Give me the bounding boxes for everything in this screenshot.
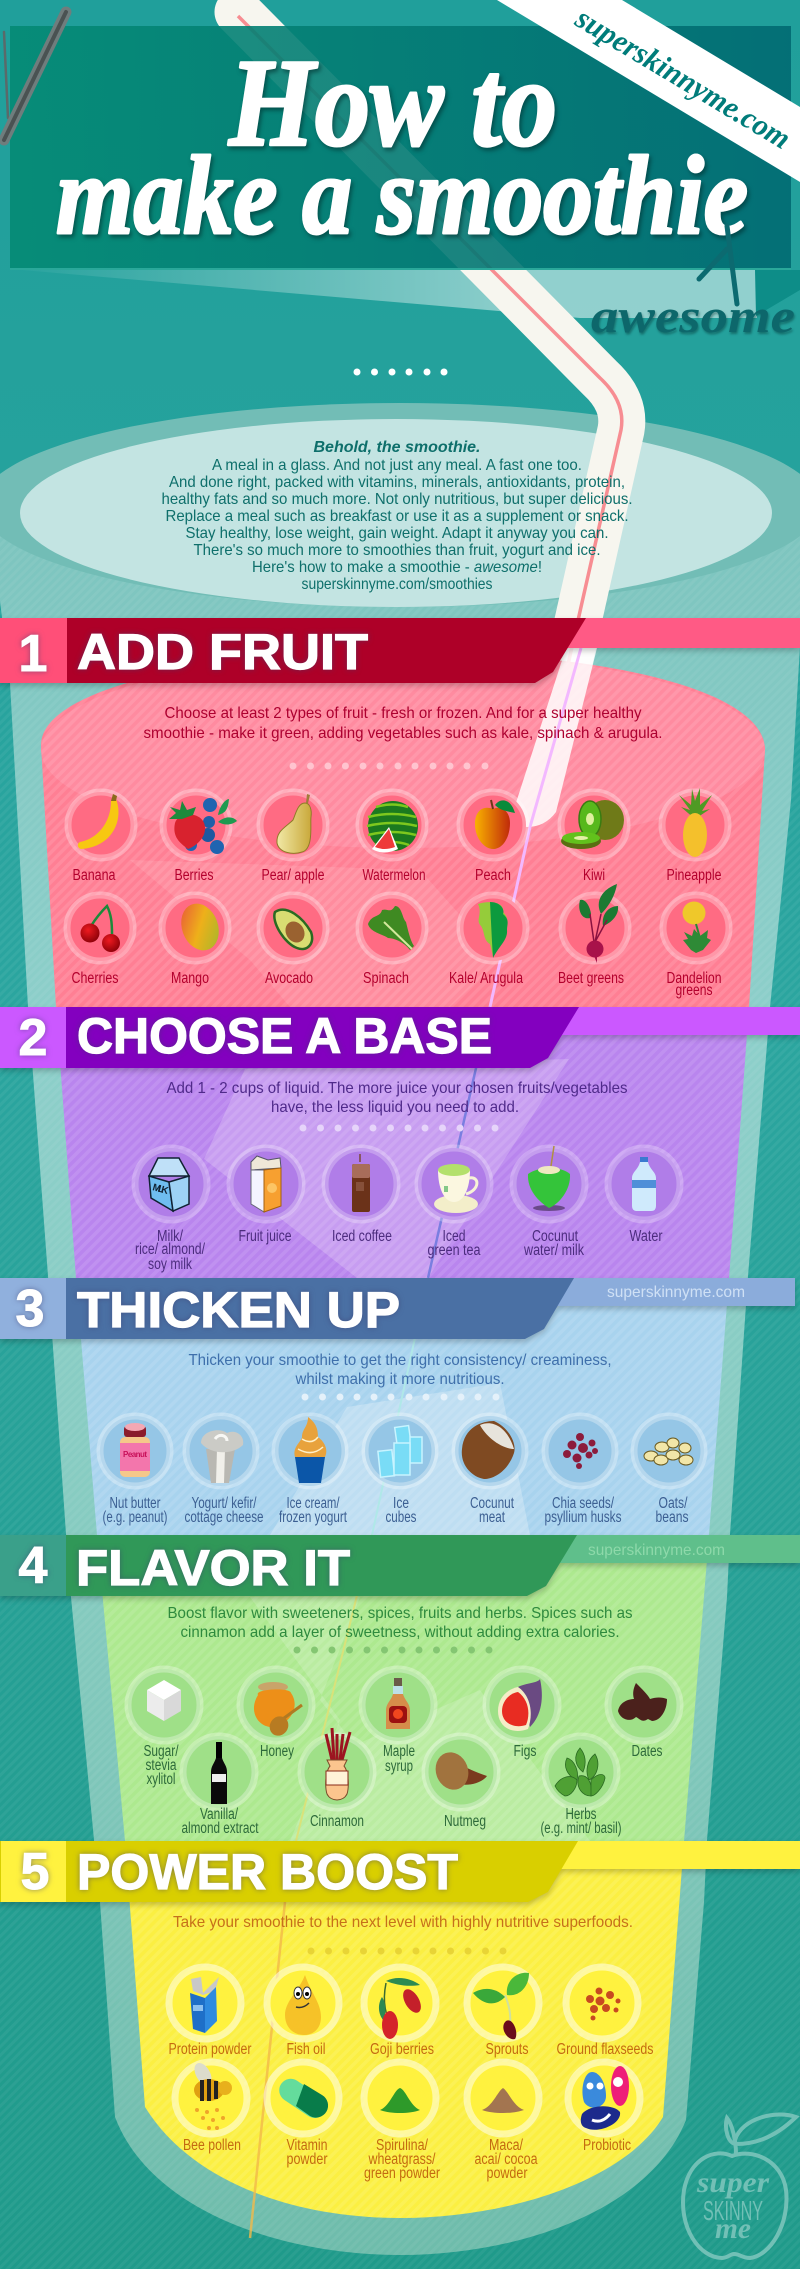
boost labels: Ground flaxseeds [556, 2041, 654, 2058]
flavor labels: Dates [632, 1743, 663, 1760]
flavor banner: superskinnyme.com [588, 1542, 725, 1559]
intro text: And done right, packed with vitamins, minerals, antioxidants, protein, [169, 474, 625, 491]
boost liquid [125, 1841, 684, 2238]
fruit labels [72, 867, 722, 999]
thicken labels: Ice [393, 1495, 409, 1512]
base text [166, 1080, 628, 1116]
fruit labels: Cherries [72, 970, 119, 987]
icon: figs [498, 1679, 542, 1731]
base labels [135, 1228, 662, 1273]
boost dots [308, 1948, 506, 1954]
boost banner: POWER BOOST [77, 1844, 458, 1900]
boost banner [0, 1841, 800, 1902]
fruit banner: ADD FRUIT [77, 624, 368, 680]
panel: power boost [0, 1841, 800, 2238]
thicken labels: cottage cheese [184, 1509, 264, 1526]
fruit circles [67, 792, 729, 961]
flavor labels: Figs [514, 1743, 537, 1760]
icon: honey [254, 1682, 302, 1739]
boost labels: powder [486, 2165, 528, 2182]
thicken labels: (e.g. peanut) [102, 1509, 168, 1526]
icon: spirulina [380, 2088, 420, 2113]
thicken labels: Chia seeds/ [552, 1495, 615, 1512]
icon: oats [644, 1438, 693, 1465]
flavor labels: xylitol [146, 1771, 176, 1788]
base labels: Cocunut [532, 1228, 579, 1245]
icon: fish oil [285, 1975, 321, 2035]
icon: ice cream [294, 1417, 326, 1483]
fruit labels: Kale/ Arugula [449, 970, 523, 987]
fruit text [144, 705, 662, 742]
thicken circles [100, 1416, 704, 1486]
flavor text: cinnamon add a layer of sweetness, without adding extra calories. [180, 1624, 620, 1641]
icon: maple syrup [386, 1678, 410, 1729]
logo: super skinny me apple [683, 2115, 796, 2258]
base text: have, the less liquid you need to add. [271, 1099, 519, 1116]
boost labels: acai/ cocoa [474, 2151, 538, 2168]
title banner [10, 26, 800, 316]
intro text: healthy fats and so much more. Not only nutritious, but super delicious. [162, 491, 632, 508]
thicken labels: Nut butter [110, 1495, 160, 1512]
flavor labels: Vanilla/ [200, 1806, 239, 1823]
thicken labels: beans [656, 1509, 689, 1526]
icon: ground flaxseeds [586, 1988, 620, 2020]
flavor labels: Herbs [566, 1806, 597, 1823]
corner ribbon: superskinnyme.com [569, 0, 797, 156]
thicken labels: frozen yogurt [279, 1509, 348, 1526]
thicken banner: THICKEN UP [77, 1282, 400, 1338]
flavor labels: Cinnamon [310, 1813, 364, 1830]
thicken banner: superskinnyme.com [607, 1284, 745, 1301]
icon: nut butter: Peanut [123, 1450, 147, 1459]
icon: water [632, 1157, 656, 1211]
fruit liquid [41, 648, 765, 1007]
boost labels: Sprouts [486, 2041, 529, 2058]
logo: super skinny me apple: me [715, 2212, 751, 2245]
icon: banana [78, 794, 119, 849]
intro text: superskinnyme.com/smoothies [302, 576, 492, 593]
boost labels: green powder [364, 2165, 440, 2182]
base labels: soy milk [148, 1256, 192, 1273]
logo: super skinny me apple: super [696, 2166, 769, 2199]
boost circles [169, 1967, 640, 2134]
flavor labels: (e.g. mint/ basil) [540, 1820, 622, 1837]
thicken banner [0, 1278, 795, 1339]
base dots [300, 1124, 498, 1132]
icon: milk [149, 1158, 189, 1211]
flavor labels: Sugar/ [144, 1743, 179, 1760]
corner ribbon [497, 0, 800, 182]
intro text [162, 439, 632, 593]
intro text: There's so much more to smoothies than fruit, yogurt and ice. [194, 542, 600, 559]
boost labels: wheatgrass/ [368, 2151, 436, 2168]
pin [4, 12, 66, 140]
boost labels: Vitamin [286, 2137, 328, 2154]
boost text: Take your smoothie to the next level with highly nutritive superfoods. [173, 1914, 633, 1931]
thicken labels [102, 1495, 689, 1526]
flavor text [168, 1605, 632, 1641]
base labels: Milk/ [157, 1228, 184, 1245]
fruit labels: Peach [475, 867, 511, 884]
flavor labels: stevia [146, 1757, 177, 1774]
icon: nutmeg [430, 1748, 487, 1794]
boost labels [168, 2041, 654, 2182]
title: How to [228, 35, 557, 173]
fruit labels: Banana [72, 867, 116, 884]
banner shadow tail [22, 270, 757, 318]
fruit labels: Pear/ apple [262, 867, 324, 884]
boost banner: 5 [21, 1843, 49, 1901]
fruit labels: Dandelion [666, 970, 722, 987]
thicken dots [302, 1394, 500, 1400]
thicken labels: Ice cream/ [286, 1495, 340, 1512]
icon: berries [169, 798, 237, 854]
intro text: Replace a meal such as breakfast or use it as a supplement or snack. [166, 508, 628, 525]
icon: milk: MILK [151, 1182, 170, 1197]
icon: cinnamon [326, 1728, 350, 1800]
icon: spinach [368, 906, 414, 950]
thicken liquid [76, 1278, 729, 1535]
boost labels: Fish oil [286, 2041, 326, 2058]
boost labels: Protein powder [168, 2041, 252, 2058]
fruit banner [0, 618, 800, 683]
base labels: Iced [442, 1228, 466, 1245]
fruit labels: Spinach [363, 970, 409, 987]
thicken labels: cubes [386, 1509, 417, 1526]
fruit dots [290, 762, 488, 770]
base labels: rice/ almond/ [135, 1241, 206, 1258]
icon: dandelion [682, 902, 711, 953]
icon: iced green tea [434, 1164, 478, 1213]
thicken text: Thicken your smoothie to get the right consistency/ creaminess, [188, 1352, 612, 1369]
thicken text [188, 1352, 612, 1388]
thicken labels: psyllium husks [544, 1509, 622, 1526]
icon: kale [478, 902, 508, 958]
boost labels: powder [286, 2151, 328, 2168]
thicken text: whilst making it more nutritious. [295, 1371, 504, 1388]
fruit banner: 1 [19, 625, 47, 683]
fruit text: Choose at least 2 types of fruit - fresh or frozen. And for a super healthy [164, 705, 642, 722]
icon: ice cubes [378, 1426, 422, 1477]
flavor banner: 4 [19, 1537, 48, 1595]
base circles [135, 1148, 680, 1220]
thicken banner: 3 [16, 1280, 44, 1338]
base labels: Fruit juice [238, 1228, 292, 1245]
flavor banner [0, 1535, 800, 1596]
fruit labels: Kiwi [583, 867, 605, 884]
panel: thicken up [0, 1278, 795, 1535]
icon: pineapple [679, 788, 712, 857]
flavor labels: Maple [383, 1743, 415, 1760]
icon: peach [475, 800, 515, 849]
base banner: 2 [19, 1009, 47, 1067]
fruit labels: greens [676, 982, 713, 999]
intro text: Behold, the smoothie. [314, 439, 480, 456]
flavor labels [144, 1743, 663, 1837]
base labels: water/ milk [523, 1242, 584, 1259]
icon: coconut water [528, 1146, 570, 1211]
icon: probiotic [581, 2066, 629, 2130]
icon: fruit juice [251, 1156, 281, 1212]
icon: bee pollen [191, 2060, 232, 2130]
panel: add fruit [0, 618, 800, 1007]
thicken labels: Yogurt/ kefir/ [192, 1495, 257, 1512]
fruit labels: Berries [174, 867, 214, 884]
awesome: awesome [591, 290, 795, 343]
base labels: Water [630, 1228, 662, 1245]
icon: dates [618, 1683, 667, 1721]
icon: coconut meat [462, 1421, 515, 1479]
icon: herbs [555, 1748, 605, 1796]
boost labels: Spirulina/ [376, 2137, 429, 2154]
thicken labels: meat [479, 1509, 506, 1526]
intro text: A meal in a glass. And not just any meal. A fast one too. [212, 457, 582, 474]
fruit labels: Pineapple [666, 867, 722, 884]
thicken labels: Cocunut [470, 1495, 515, 1512]
flavor labels: Honey [260, 1743, 294, 1760]
icon: mango [175, 898, 225, 956]
fruit labels: Avocado [265, 970, 313, 987]
icon: vanilla [211, 1742, 227, 1804]
icon: vitamin powder [275, 2074, 331, 2122]
flavor labels: syrup [385, 1758, 413, 1775]
icon: avocado [274, 910, 312, 949]
intro text: Here's how to make a smoothie - awesome! [252, 559, 542, 576]
icon: pear [277, 794, 311, 853]
boost labels: Maca/ [489, 2137, 524, 2154]
base banner [0, 1007, 800, 1068]
icon: sugar cube [147, 1680, 181, 1721]
icon: protein powder [190, 1977, 219, 2033]
icon: sprouts [473, 1973, 529, 2039]
flavor labels: almond extract [182, 1820, 259, 1837]
icon: beet greens [579, 884, 618, 963]
flavor text: Boost flavor with sweeteners, spices, fruits and herbs. Spices such as [168, 1605, 632, 1622]
boost labels: Goji berries [370, 2041, 434, 2058]
fruit labels: Mango [171, 970, 209, 987]
icon: nut butter [120, 1423, 150, 1477]
intro text: Stay healthy, lose weight, gain weight. Adapt it anyway you can. [186, 525, 608, 542]
thicken labels: Oats/ [658, 1495, 688, 1512]
fruit text: smoothie - make it green, adding vegetables such as kale, spinach & arugula. [144, 725, 662, 742]
decorative dots [354, 368, 448, 376]
icon: watermelon [367, 801, 418, 852]
flavor labels: Nutmeg [444, 1813, 486, 1830]
base liquid [56, 1007, 749, 1278]
icon: iced coffee [352, 1154, 370, 1212]
arrow to awesome [699, 226, 737, 304]
flavor banner: FLAVOR IT [76, 1540, 350, 1596]
title [56, 35, 748, 258]
icon: chia [563, 1433, 598, 1469]
base labels: Iced coffee [332, 1228, 392, 1245]
boost labels: Probiotic [583, 2137, 631, 2154]
flavor liquid [97, 1535, 709, 1841]
icon: kiwi [561, 800, 624, 849]
flavor circles [128, 1669, 680, 1808]
panel: flavor it [0, 1535, 800, 1841]
base labels: green tea [428, 1242, 481, 1259]
fruit labels: Beet greens [558, 970, 624, 987]
panel: choose a base [0, 1007, 800, 1278]
icon: cherries [80, 906, 120, 952]
flavor dots [294, 1646, 492, 1654]
icon: maca [482, 2088, 524, 2113]
boost labels: Bee pollen [183, 2137, 241, 2154]
icon: goji berries [379, 1978, 425, 2039]
fruit labels: Watermelon [362, 867, 426, 884]
base text: Add 1 - 2 cups of liquid. The more juice your chosen fruits/vegetables [166, 1080, 628, 1097]
icon: yogurt [201, 1430, 243, 1483]
straw [238, 12, 622, 808]
base banner: CHOOSE A BASE [77, 1008, 492, 1064]
